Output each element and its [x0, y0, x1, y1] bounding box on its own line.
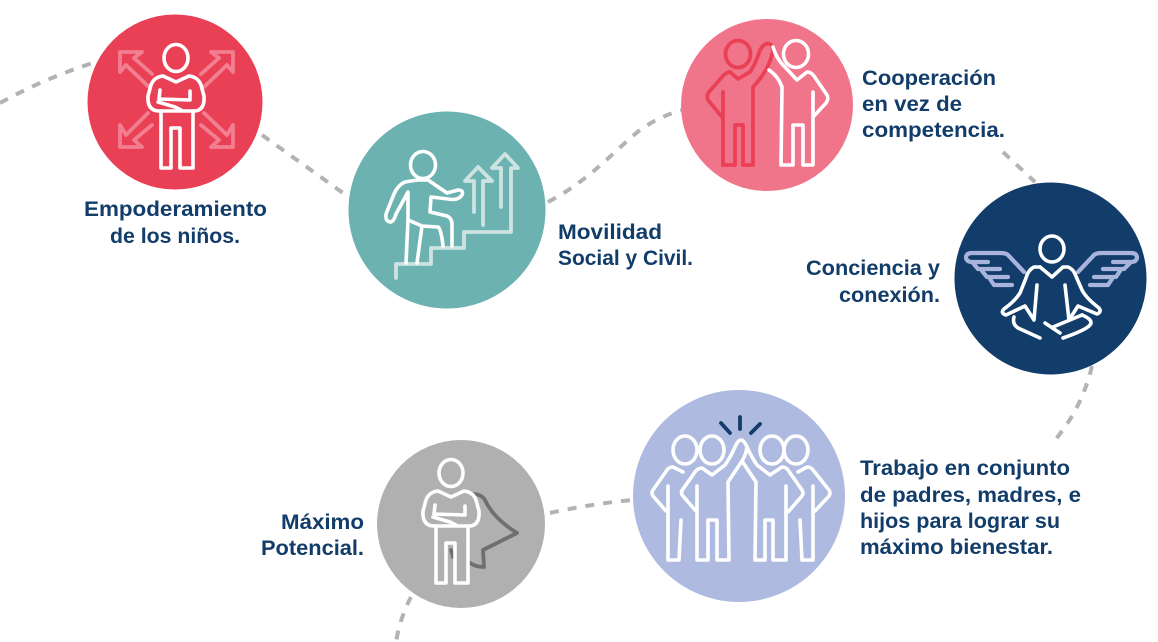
label: Máximo Potencial: Potencial. — [261, 537, 364, 560]
dashed path: awareness to joint work — [1055, 366, 1092, 440]
circle background — [681, 19, 853, 191]
dashed path: cooperation to awareness — [1003, 152, 1035, 182]
label: Cooperación: competencia. — [862, 119, 1005, 142]
icon: meditating person — [1002, 236, 1100, 338]
panel: Movilidad — [348, 112, 546, 308]
circle background — [88, 14, 262, 190]
icon: cape — [451, 494, 517, 567]
circle background — [348, 112, 546, 308]
label: Trabajo en conjunto: de padres, madres, e — [860, 484, 1081, 507]
dashed path: mobility to cooperation — [548, 110, 682, 202]
label: Empoderamiento: Empoderamiento — [84, 198, 267, 221]
icon: group of four people high-fiving — [652, 436, 830, 560]
panel: Empoderamiento — [88, 14, 262, 190]
dashed path: empowerment to mobility — [262, 135, 350, 198]
label: Cooperación — [862, 67, 1005, 142]
label: Conciencia — [806, 257, 940, 307]
dashed path: outgoing at bottom — [396, 597, 411, 642]
panel: Conciencia — [954, 182, 1146, 374]
icon: expanding arrows — [120, 52, 233, 147]
label: Máximo Potencial: Máximo — [281, 511, 364, 534]
label: Trabajo en conjunto: hijos para lograr su — [860, 510, 1060, 533]
circle background — [954, 182, 1146, 374]
label: Trabajo en conjunto — [860, 457, 1081, 559]
label: Movilidad — [558, 221, 693, 270]
label: Cooperación: en vez de — [862, 93, 962, 116]
circle background — [633, 390, 845, 602]
icon: person with crossed arms — [423, 460, 479, 583]
label: Empoderamiento: de los niños. — [110, 225, 240, 248]
icon: person red — [707, 40, 773, 165]
panel: Cooperación — [681, 19, 853, 191]
circle background — [377, 440, 545, 608]
label: Trabajo en conjunto: máximo bienestar. — [860, 536, 1053, 559]
label: Cooperación: Cooperación — [862, 67, 996, 90]
icon: person white — [769, 40, 828, 165]
dashed path: incoming from left — [0, 62, 96, 103]
icon: stairs and arrows — [396, 154, 518, 278]
label: Movilidad: Movilidad — [558, 221, 662, 244]
label: Conciencia: Conciencia y — [806, 257, 940, 280]
label: Máximo Potencial — [261, 511, 364, 560]
panel: Máximo Potencial — [377, 440, 545, 608]
panel: Trabajo en conjunto — [633, 390, 845, 602]
icon: person climbing — [386, 152, 462, 263]
label: Conciencia: conexión. — [839, 284, 940, 307]
dashed path: joint work to maximum potential — [550, 500, 632, 513]
label: Empoderamiento — [84, 198, 267, 248]
icon: wings — [966, 253, 1137, 285]
icon: spark rays — [721, 417, 760, 433]
label: Movilidad: Social y Civil. — [558, 247, 693, 270]
icon: person with crossed arms — [148, 44, 204, 168]
label: Trabajo en conjunto: Trabajo en conjunto — [860, 457, 1070, 480]
